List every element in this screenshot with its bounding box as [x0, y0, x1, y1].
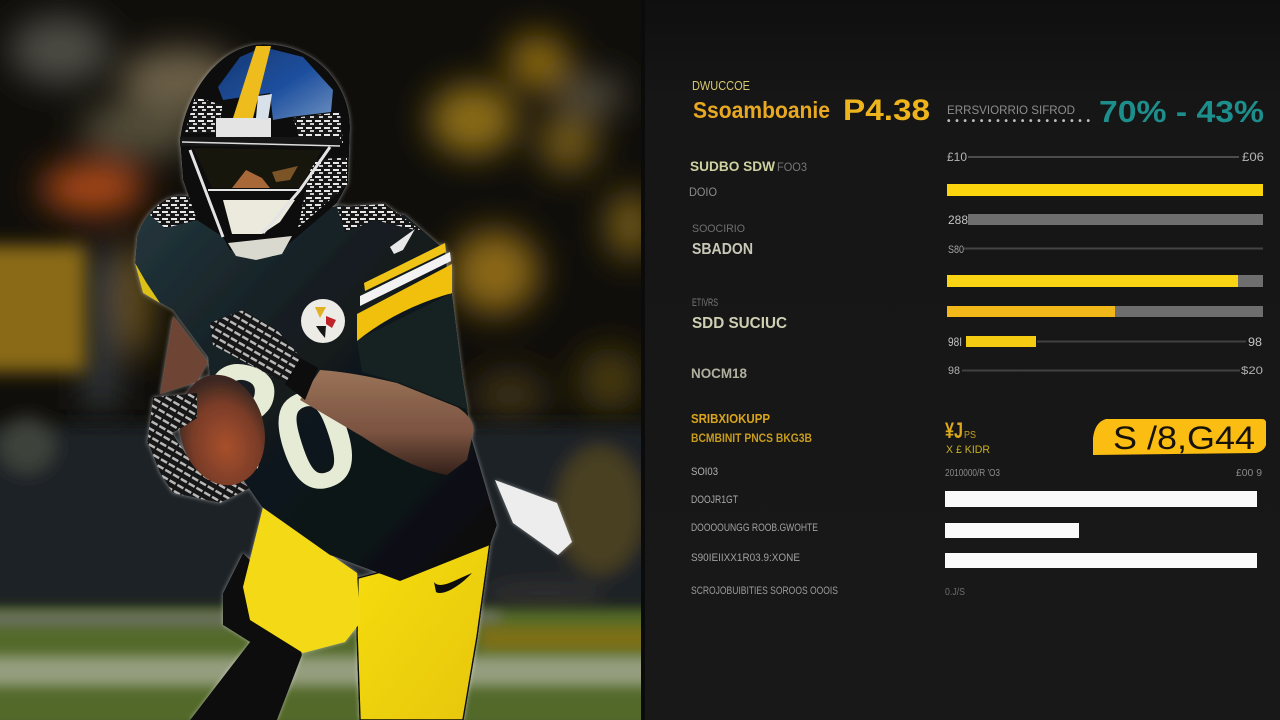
left shoulder trim: [135, 263, 160, 303]
bar chart: white bars: 2010000/R 'O3: [945, 467, 1000, 479]
nike swoosh on chest: [390, 229, 415, 254]
lower section heading: [691, 411, 812, 445]
jersey number 2: 2: [180, 328, 294, 499]
dotted row: ••••••••••••••••••: [947, 116, 1090, 127]
header stats: [692, 78, 1264, 129]
helmet shell: [180, 44, 350, 257]
helmet blue dome: [218, 47, 333, 120]
row 8 range line: [948, 365, 1263, 377]
row 2 full yellow bar: [947, 184, 1263, 196]
upper glove: [210, 310, 303, 382]
back leg: [190, 553, 302, 720]
row 4 range line: S80: [948, 244, 964, 256]
small yellow stat: [945, 418, 990, 456]
nike swoosh on pants: [434, 573, 472, 593]
row 7 short bar: [948, 335, 1262, 349]
face skin right: [272, 166, 298, 182]
kicker: DWUCCOE: [692, 78, 750, 93]
right shoulder patch: [337, 204, 423, 232]
row 3 gray bar: [948, 213, 1263, 227]
panel: blurred football field: [0, 608, 660, 720]
row labels: section one: SBADON: [692, 241, 753, 258]
helmet white front bumper: [216, 118, 271, 138]
bar chart: white bars: [945, 467, 1262, 598]
row labels: section two: [691, 466, 838, 597]
row 8 range line: 98: [948, 365, 960, 377]
sleeve white stripe: [360, 252, 451, 306]
row labels: section one: SDD SUCIUC: [692, 315, 787, 332]
row labels: section two: DOOOOUNGG ROOB.GWOHTE: [691, 522, 818, 534]
face opening: [193, 148, 322, 188]
row labels: section one: SOOCIRIO: [692, 223, 745, 235]
face mask top bar: [180, 137, 340, 146]
row 6 orange bar with gray remainder: [947, 306, 1263, 317]
helmet speckled side right: [298, 157, 347, 228]
small yellow stat: PS: [964, 430, 976, 441]
row 5 yellow bar with gray remainder: [947, 275, 1263, 287]
team logo: [301, 299, 345, 343]
helmet speckled side left: [185, 97, 223, 133]
panel: statistics: [641, 0, 1280, 720]
small yellow stat: ¥J: [945, 418, 963, 443]
left thigh: [243, 507, 360, 653]
wristband: [285, 358, 318, 400]
row 8 range line: $20: [1241, 365, 1263, 377]
football: [168, 366, 276, 494]
left arm skin: [160, 316, 208, 394]
row 7 short bar: 98I: [948, 335, 962, 349]
jersey number 0: 0: [254, 353, 377, 526]
sleeve thin yellow stripe: [364, 243, 446, 291]
bar chart: white bars: 0.J/S: [945, 586, 965, 598]
row 7 short bar: 98: [1248, 335, 1262, 349]
small yellow stat: X £ KIDR: [946, 444, 990, 456]
teal range: 70% - 43%: [1099, 94, 1264, 129]
headline figure: P4.38: [843, 94, 930, 127]
right pant leg: [357, 543, 490, 720]
helmet speckled upper right: [293, 112, 343, 143]
row labels: section one: ETIVRS: [692, 297, 718, 309]
helmet yellow stripe: [233, 46, 271, 118]
row 1 range line: [947, 150, 1264, 164]
bar chart: upper comparison bars: [947, 150, 1264, 377]
mouth guard: [223, 200, 295, 234]
player figure: [135, 44, 572, 720]
panel: photo background: [0, 0, 660, 720]
callout badge: S /8,G44: [1113, 420, 1255, 456]
row 1 range line: £06: [1242, 150, 1264, 164]
left shoulder patch: [150, 196, 198, 228]
chin strap: [228, 236, 292, 260]
bar chart: white bars: £00 9: [1236, 467, 1262, 479]
row labels: section two: SCROJOBUIBITIES SOROOS OOOIS: [691, 585, 838, 597]
row labels: section two: SOI03: [691, 466, 718, 478]
upper arm: [300, 370, 473, 475]
row labels: section one: FOO3: [777, 160, 807, 174]
sleeve: [357, 293, 468, 410]
row labels: section two: S90IEIIXX1R03.9:XONE: [691, 552, 800, 564]
face mask bars: [190, 147, 330, 237]
row 3 gray bar: 288: [948, 213, 968, 227]
top glove fingers: [147, 393, 197, 445]
row 1 range line: £10: [947, 150, 967, 164]
row labels: section one: NOCM18: [691, 365, 747, 381]
row labels: section one: DOIO: [689, 185, 717, 199]
lower section heading: SRIBXIOKUPP: [691, 411, 770, 426]
waist towel: [495, 480, 572, 555]
lower glove: [147, 430, 250, 503]
sleeve yellow band: [357, 264, 452, 341]
lower section heading: BCMBINIT PNCS BKG3B: [691, 431, 812, 445]
row labels: section two: DOOJR1GT: [691, 494, 738, 506]
face skin: [232, 170, 270, 188]
jersey torso: [135, 195, 497, 581]
helmet white marks: [256, 94, 272, 120]
comparison label: ERRSVIORRIO SIFROD: [947, 105, 1075, 117]
subject name: Ssoamboanie: [693, 97, 830, 123]
helmet: [180, 44, 350, 260]
row labels: section one: SUDBO SDW: [690, 158, 776, 174]
row labels: section one: [689, 158, 807, 381]
